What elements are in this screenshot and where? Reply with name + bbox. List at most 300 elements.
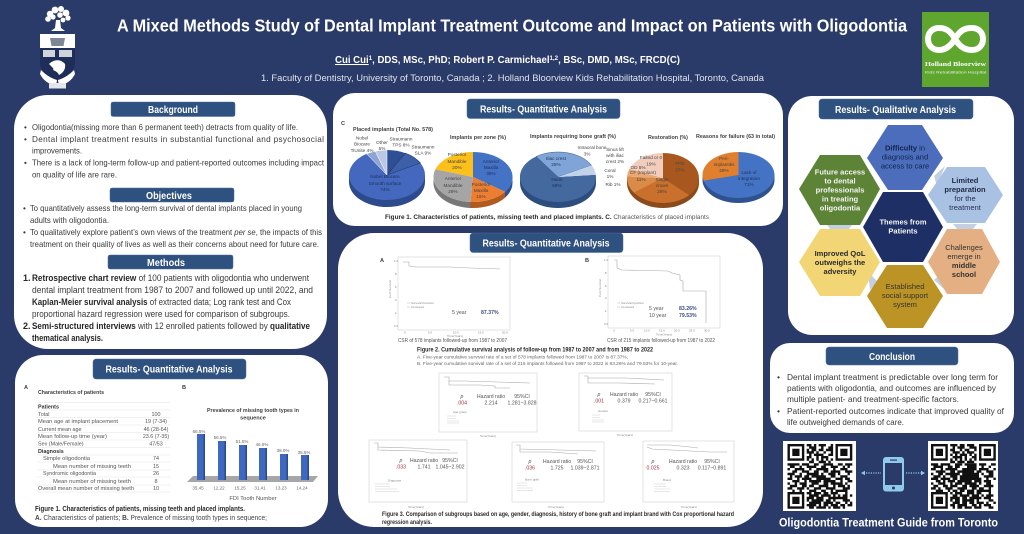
chart: survival curve A: CSR of 578 implants followed-up from 1987 to 2007	[398, 338, 507, 344]
table: characteristics of patients: 74	[153, 456, 159, 462]
pie chart: implants per zone: Mandible	[447, 159, 467, 164]
table: characteristics of patients: 23.6 (7-35)	[143, 434, 169, 440]
bar chart: prevalence of missing tooth types: 15,25	[234, 486, 246, 490]
hexagon: established social support: Established	[886, 282, 924, 291]
pie chart: restoration	[627, 135, 699, 208]
chart: survival curve A: A	[380, 258, 384, 264]
chart: subgroup gender: 0.217~0.661	[638, 398, 668, 404]
heading: Results- Qualitative Analysis	[819, 99, 973, 119]
chart: subgroup brand: Brand	[663, 478, 671, 482]
pie chart: placed implants: Placed implants (Total No. 578)	[353, 127, 433, 133]
hexagon: limited preparation: preparation	[944, 185, 986, 194]
heading: Results- Quantitative Analysis	[467, 99, 620, 118]
text block: conclusion bullets: •	[777, 406, 780, 416]
chart: survival curve B: .6	[604, 284, 607, 288]
text block: conclusion bullets: Patient-reported outcomes indicate that improved quality of	[787, 406, 1005, 416]
panel: background, objectives and methods	[14, 95, 327, 349]
chart: subgroup bone graft	[512, 442, 604, 509]
pie chart: implants requiring bone graft: crest 2%	[606, 159, 624, 164]
hexagon: future access	[799, 155, 880, 225]
pie chart: reasons for failure: Reasons for failure (63 in total)	[696, 134, 775, 140]
chart: survival curve A: 5 year	[452, 310, 467, 316]
pie chart: restoration: 37%	[675, 168, 685, 172]
panel: placed implants pie charts: C	[341, 121, 345, 127]
text block: conclusion bullets: life outweighed demands of care.	[787, 417, 904, 427]
authors: 1,2	[550, 55, 558, 62]
pie chart: reasons for failure: Peri-	[719, 156, 729, 161]
heading: Methods	[108, 255, 233, 269]
chart: survival curve A: Cum Survival	[388, 280, 392, 298]
pie chart: reasons for failure: Lack of	[741, 170, 757, 175]
pie chart: implants requiring bone graft: Implants requiring bone graft (%)	[530, 134, 616, 140]
icon: phone with arrows	[861, 457, 925, 492]
text block: background bullets: on quality of life are rare.	[32, 170, 117, 180]
heading: Objectives: Objectives	[146, 191, 192, 202]
text block: methods list: thematical analysis.	[32, 333, 103, 343]
text block: conclusion bullets: •	[777, 372, 780, 382]
text block: background bullets: •	[24, 123, 27, 132]
pie chart: implants per zone: Maxilla	[484, 165, 499, 170]
chart: subgroup diagnosis: 95%CI	[442, 458, 458, 464]
table: characteristics of patients: A	[24, 385, 28, 391]
chart: subgroup bone graft: p	[528, 459, 532, 465]
bar chart: prevalence of missing tooth types: 38.0%	[277, 448, 289, 453]
logo: Holland Bloorview: Kids Rehabilitation Hospital	[925, 70, 986, 74]
chart: survival curve B: 30.0	[704, 328, 710, 332]
pie chart: placed implants: Straumann	[390, 136, 413, 142]
table: characteristics of patients: 15	[153, 464, 159, 470]
chart: subgroup diagnosis: Time(Years)	[408, 505, 424, 509]
chart: survival curve B: .4	[604, 296, 607, 300]
pie chart: placed implants: Smooth surface	[369, 181, 402, 186]
chart: subgroup brand: 0.025	[647, 466, 660, 472]
chart: survival curve B: 0.0	[604, 322, 609, 326]
pie chart: implants requiring bone graft: with iliac	[606, 153, 625, 158]
logo: Holland Bloorview: Holland Bloorview	[925, 61, 987, 68]
text block: methods list: 1.	[23, 273, 31, 283]
hexagon: established social support: system	[893, 300, 917, 309]
chart: subgroup diagnosis: 1.741	[418, 464, 431, 470]
chart: subgroup bone graft: Hazard ratio	[543, 459, 571, 465]
caption: figure 1 A and B: A. Characteristics of patients; B. Prevalence of missing tooth types in sequence;	[35, 515, 267, 522]
chart: survival curve B: CSR of 215 implants followed-up from 1987 to 2022	[607, 338, 715, 344]
hexagon: improved QoL	[799, 229, 880, 296]
authors: Cui Cui	[335, 55, 369, 66]
hexagon: future access: oligodontia	[820, 204, 861, 212]
table: characteristics of patients: 100	[152, 412, 160, 418]
chart: subgroup age: Hazard ratio	[477, 394, 505, 400]
bar chart: prevalence of missing tooth types: 66.5%	[193, 429, 205, 434]
chart: survival curve B: Survival Function	[621, 301, 644, 305]
chart: subgroup bone graft: Time(Years)	[548, 505, 564, 509]
pie chart: placed implants: Nobel Biocare	[370, 174, 400, 179]
chart: survival curve B: 79.53%	[679, 313, 697, 319]
chart: subgroup age: p	[460, 394, 464, 400]
hexagon: improved QoL: adversity	[824, 267, 857, 276]
chart: survival curve B: 5.0	[630, 328, 635, 332]
table: characteristics of patients: 10	[153, 486, 159, 492]
text block: objectives bullets: •	[23, 204, 26, 213]
chart: survival curve B: Censored	[621, 305, 634, 309]
hexagon: future access: to dental	[824, 176, 856, 186]
chart: subgroup diagnosis: Hazard ratio	[410, 458, 438, 464]
chart: subgroup bone graft: 95%CI	[577, 459, 593, 465]
chart: subgroup diagnosis: Diagnosis	[388, 478, 402, 482]
chart: subgroup brand: p	[651, 459, 655, 465]
chart: survival curve B	[585, 256, 720, 344]
pie chart: restoration: Failed or 0	[640, 155, 662, 160]
chart: survival curve B: 15.0	[659, 328, 665, 332]
hexagon: future access: Future access	[815, 168, 865, 176]
chart: survival curve B: 20.0	[674, 328, 680, 332]
table: characteristics of patients: Syndromic oligodontia	[43, 471, 96, 477]
hexagon: established social support: social support	[882, 291, 929, 300]
affiliations: 1. Faculty of Dentistry, University of Toronto, Canada ; 2. Holland Bloorview Kids Rehabilitation Hospital, Toronto, Canada	[261, 73, 765, 84]
chart: subgroup gender: 0.379	[618, 398, 631, 404]
chart: survival curve A: 20.0	[502, 330, 508, 334]
chart: survival curve B: 83.26%	[679, 306, 697, 312]
hexagon: themes from patients: Themes from	[879, 218, 927, 226]
hexagon: challenges	[928, 229, 1000, 294]
hexagon: difficulty: diagnosis and	[882, 152, 928, 162]
authors: , DDS, MSc, PhD; Robert P. Carmichael	[372, 55, 550, 66]
heading: Results- Quantitative Analysis	[93, 359, 246, 379]
hexagon: challenges: emerge in	[947, 252, 981, 261]
text block: methods list: Semi-structured interviews with 12 enrolled patients followed by qualitative	[32, 321, 310, 331]
chart: survival curve B: Time(Years)	[656, 332, 672, 336]
table: characteristics of patients: Mean follow-up time (year)	[38, 434, 107, 440]
heading: Results- Quantitative Analysis: Results- Quantitative Analysis	[480, 104, 607, 116]
table: characteristics of patients: Mean number of missing teeth	[53, 479, 131, 485]
chart: survival curve B: 10 year	[649, 313, 667, 319]
pie chart: implants requiring bone graft: 1%	[607, 174, 613, 179]
pie chart: restoration: 19%	[646, 162, 656, 166]
text block: methods list: Retrospective chart review of 100 patients with oligodontia who underwent	[32, 273, 309, 283]
pie chart: implants per zone: Implants per zone (%)	[450, 135, 506, 141]
text block: conclusion bullets: patients with oligodontia, and outcomes are influenced by	[787, 383, 997, 393]
table: characteristics of patients: Simple oligodontia	[43, 456, 90, 462]
bar chart: prevalence of missing tooth types: 35.5%	[298, 450, 310, 455]
caption: figure 2: B. Five-year cumulative survival rate of a set of 215 implants followed from 1987 to 2022 is 83.26% and 79.53% for 10-year.	[417, 361, 678, 366]
chart: subgroup bone graft: 1.725	[551, 466, 564, 472]
text block: conclusion bullets: multiple patient- and treatment-specific factors.	[787, 394, 959, 404]
chart: subgroup brand: 0.117~0.891	[698, 466, 726, 472]
chart: subgroup gender: .001	[594, 398, 604, 404]
pie chart: placed implants: 74%	[380, 187, 390, 192]
table: characteristics of patients: 26	[153, 471, 159, 477]
authors: 1	[369, 55, 372, 62]
chart: subgroup gender: 95%CI	[645, 392, 661, 398]
title: A Mixed Methods Study of Dental Implant Treatment Outcome and Impact on Patients with Oligodontia	[117, 16, 907, 36]
pie chart: placed implants: TiUnite 4%	[351, 148, 373, 153]
bar chart: prevalence of missing tooth types	[182, 385, 318, 502]
pie chart: implants per zone: 35%	[486, 171, 496, 176]
panel: conclusion	[770, 343, 1014, 433]
heading: Results- Qualitative Analysis: Results- Qualitative Analysis	[835, 105, 956, 116]
caption: figure 3	[382, 512, 734, 526]
chart: subgroup diagnosis: 1.045~2.902	[436, 464, 465, 470]
chart: survival curve A: 10.0	[453, 330, 459, 334]
chart: survival curve A: .6	[394, 285, 397, 289]
pie chart: implants per zone: 20%	[452, 165, 462, 170]
panel: qualitative analysis	[788, 96, 1014, 335]
pie chart: implants per zone: Posterior	[472, 182, 491, 187]
chart: survival curve A: 87.37%	[481, 310, 499, 316]
bar chart: prevalence of missing tooth types: 13,23	[275, 486, 287, 490]
pie chart: placed implants: Nobel	[356, 136, 368, 140]
chart: survival curve B: Cum Survival	[598, 279, 602, 297]
table: characteristics of patients: Mean age at implant placement	[38, 419, 119, 425]
chart: survival curve A: .8	[394, 272, 397, 276]
table: characteristics of patients: Sex (Male/Female)	[38, 442, 84, 448]
table: characteristics of patients	[24, 385, 170, 492]
text block: background bullets	[24, 123, 325, 180]
heading: Conclusion: Conclusion	[869, 352, 915, 363]
chart: survival curve A: .2	[394, 311, 397, 315]
text block: objectives bullets: •	[23, 228, 26, 237]
table: characteristics of patients: Patients	[38, 404, 59, 410]
text block: objectives bullets: adults with oligodontia.	[30, 216, 109, 225]
table: characteristics of patients: Characteristics of patients	[38, 390, 104, 396]
table: characteristics of patients: Current mean age	[38, 427, 81, 433]
bar chart: prevalence of missing tooth types: sequence	[240, 416, 266, 422]
pie chart: implants requiring bone graft: 25%	[551, 162, 561, 167]
hexagon: themes from patients	[863, 192, 943, 262]
text block: background bullets: There is a lack of long-term follow-up and patient-reported outcomes including impact	[32, 158, 325, 168]
hexagon: difficulty	[867, 125, 943, 190]
heading: Results- Quantitative Analysis: Results- Quantitative Analysis	[106, 364, 233, 376]
pie chart: implants per zone: Anterior	[483, 159, 500, 164]
chart: subgroup age: .004	[457, 400, 467, 406]
chart: subgroup age	[439, 373, 537, 438]
chart: subgroup brand: Time(Years)	[681, 505, 697, 509]
pie chart: implants requiring bone graft: 68%	[552, 183, 562, 188]
chart: subgroup diagnosis: p	[399, 458, 403, 464]
QR code: left	[783, 441, 856, 511]
hexagon: established social support	[867, 265, 943, 328]
caption: figure 2: Figure 2. Cumulative survival analysis of follow-up from 1987 to 2007 and from 1987 to 2022	[417, 348, 654, 354]
pie chart: implants requiring bone graft: Iliac crest	[546, 156, 567, 161]
bar chart: prevalence of missing tooth types: 46.5%	[256, 442, 268, 447]
pie chart: restoration: 11%	[636, 177, 646, 182]
authors: , BSc, DMD, MSc, FRCD(C)	[558, 55, 680, 66]
panel: survival analysis	[338, 233, 763, 527]
chart: survival curve A: Survival Function	[411, 301, 434, 305]
pie chart: restoration: crown	[656, 183, 669, 188]
caption: treatment guide: Oligodontia Treatment Guide from Toronto	[779, 516, 998, 530]
hexagon: difficulty: access to care	[881, 162, 929, 170]
caption: figure 1 C: Figure 1. Characteristics of patients, missing teeth and placed implants. C. Characteristics of placed implants	[385, 214, 710, 221]
chart: survival curve A: Censored	[411, 305, 424, 309]
chart: survival curve B: 5 year	[649, 306, 664, 312]
hexagon: challenges: middle	[952, 261, 976, 270]
pie chart: placed implants: Other	[376, 140, 388, 145]
chart: survival curve A: Time(Years)	[447, 334, 463, 338]
table: characteristics of patients: Overall mean number of missing teeth	[38, 486, 134, 492]
pie chart: implants per zone: Mandible	[443, 183, 463, 188]
pie chart: implants per zone	[433, 135, 513, 208]
hexagon: future access: professionals	[816, 186, 864, 194]
text block: methods list: 2.	[23, 321, 31, 331]
pie chart: placed implants: SLA 9%	[415, 150, 431, 156]
chart: subgroup gender: Gender	[598, 409, 608, 413]
chart: subgroup diagnosis	[369, 440, 467, 509]
hexagon: challenges: Challenges	[945, 243, 983, 252]
caption: figure 2	[417, 348, 678, 366]
hexagon: difficulty: Difficulty in	[885, 144, 925, 152]
chart: survival curve A: 5.0	[428, 330, 433, 334]
heading: Results- Quantitative Analysis	[470, 233, 623, 252]
chart: subgroup age: 95%CI	[514, 394, 530, 400]
bar chart: prevalence of missing tooth types: 51.5%	[236, 439, 248, 444]
text block: background bullets: Dental implant treatment results in substantial functional and psychosocial	[32, 135, 324, 144]
text block: objectives bullets: To qualitatively explore patient’s own views of the treatment per se, the impacts of this	[30, 228, 322, 237]
chart: subgroup age: 1.281~3.828	[508, 400, 537, 406]
chart: subgroup brand: 95%CI	[704, 459, 720, 465]
pie chart: restoration: Restoration (%)	[648, 135, 688, 141]
chart: subgroup gender	[579, 373, 672, 437]
chart: survival curve B: .8	[604, 271, 607, 275]
pie chart: implants requiring bone graft: 3%	[584, 152, 590, 156]
caption: figure 3: regression analysis.	[382, 520, 432, 526]
logo: University of Toronto crest	[40, 6, 75, 88]
chart: subgroup bone graft: Bone graft	[525, 478, 539, 482]
chart: subgroup brand: 0.323	[677, 466, 690, 472]
pie chart: implants per zone: 29%	[448, 189, 458, 194]
panel: placed implants pie charts	[333, 93, 783, 226]
heading: Objectives	[110, 188, 234, 202]
chart: survival curve B: 25.0	[689, 328, 695, 332]
chart: survival curve A: 0	[404, 330, 406, 334]
pie chart: restoration: FPD	[675, 161, 685, 166]
chart: subgroup bone graft: .036	[525, 466, 535, 472]
text block: background bullets: •	[24, 158, 27, 168]
table: characteristics of patients: Mean number of missing teeth	[53, 464, 131, 470]
text block: objectives bullets	[23, 204, 322, 249]
pie chart: restoration: OD 5%	[630, 165, 646, 170]
pie chart: implants per zone: 16%	[476, 194, 486, 199]
hexagon: themes from patients: Patients	[888, 226, 918, 236]
text block: conclusion bullets: Dental implant treatment is predictable over long term for	[787, 372, 998, 382]
text block: methods list: Kaplan-Meier survival analysis of extracted data; Log rank test and Cox	[32, 297, 291, 307]
pie chart: reasons for failure	[696, 134, 775, 203]
text block: methods list: proportional hazard regression were used for comparison of subgroups.	[32, 309, 290, 319]
hexagon: limited preparation	[928, 167, 1003, 223]
pie chart: restoration: 28%	[657, 189, 667, 194]
pie chart: implants requiring bone graft: Sinus lift	[606, 147, 625, 152]
chart: subgroup age: Time(Years)	[480, 434, 496, 438]
caption: figure 3: Figure 3. Comparison of subgroups based on age, gender, diagnosis, history of bone graft and implant brand with Cox proportional hazard	[382, 512, 734, 518]
pie chart: reasons for failure: integration	[738, 176, 760, 181]
pie chart: implants requiring bone graft: Rib 1%	[605, 182, 621, 187]
pie chart: implants requiring bone graft	[520, 134, 625, 208]
text block: background bullets: •	[24, 135, 27, 144]
pie chart: reasons for failure: 71%	[744, 182, 754, 187]
table: characteristics of patients: Diagnosis	[38, 449, 64, 455]
bar chart: prevalence of missing tooth types: 14,24	[296, 486, 308, 490]
logo: Holland Bloorview	[922, 12, 989, 87]
chart: survival curve B: .2	[604, 309, 607, 313]
table: characteristics of patients: Total	[38, 412, 49, 418]
pie chart: implants per zone: Posterior	[448, 152, 467, 157]
chart: survival curve A: 1.0	[394, 259, 399, 263]
hexagon: limited preparation: for the	[954, 194, 976, 203]
chart: subgroup bone graft: 1.039~2.871	[570, 466, 600, 472]
pie chart: reasons for failure: implantitis	[714, 162, 735, 167]
pie chart: reasons for failure: 29%	[719, 168, 729, 173]
heading: Results- Quantitative Analysis: Results- Quantitative Analysis	[482, 238, 610, 250]
pie chart: placed implants	[349, 127, 435, 207]
heading: Methods: Methods	[147, 258, 185, 269]
chart: survival curve B: 1.0	[604, 258, 609, 262]
pie chart: placed implants: Biocare	[354, 142, 370, 146]
hexagon: limited preparation: treatment	[949, 203, 982, 212]
bar chart: prevalence of missing tooth types: Prevalence of missing tooth types in	[207, 408, 300, 414]
heading: Conclusion	[826, 347, 958, 365]
chart: subgroup gender: Time(Years)	[617, 433, 633, 437]
chart: survival curve B: B	[585, 258, 589, 264]
pie chart: implants requiring bone graft: Coral	[604, 168, 616, 173]
chart: survival curve B: 0	[613, 328, 615, 332]
pie chart: implants per zone: Anterior	[445, 176, 462, 181]
pie chart: placed implants: TPS 8%	[392, 142, 410, 148]
hexagon: improved QoL: outweighs the	[815, 258, 865, 267]
chart: subgroup age: 2.214	[485, 400, 498, 406]
hexagon: improved QoL: Improved QoL	[815, 249, 866, 258]
bar chart: prevalence of missing tooth types: 56.5%	[214, 435, 226, 440]
table: characteristics of patients: 19 (7-34)	[145, 419, 167, 425]
chart: subgroup gender: Hazard ratio	[610, 392, 638, 398]
panel: patient characteristics results	[15, 355, 328, 527]
pie chart: implants requiring bone graft: None	[551, 177, 563, 182]
bar chart: prevalence of missing tooth types: FDI Tooth Number	[229, 496, 277, 502]
hexagon: future access: in treating	[822, 194, 859, 204]
chart: survival curve A: .4	[394, 298, 397, 302]
chart: subgroup brand	[643, 441, 734, 509]
hexagon: challenges: school	[952, 270, 976, 279]
chart: survival curve A	[380, 257, 510, 344]
hexagon: limited preparation: Limited	[952, 176, 979, 185]
chart: subgroup gender: p	[597, 392, 601, 398]
bar chart: prevalence of missing tooth types: 31,41	[254, 486, 266, 490]
chart: subgroup diagnosis: .033	[396, 464, 406, 470]
pie chart: placed implants: 5%	[379, 146, 385, 151]
text block: background bullets: Oligodontia(missing more than 6 permanent teeth) detracts from quality of life.	[32, 123, 298, 132]
bar chart: prevalence of missing tooth types: 35,45	[192, 486, 204, 490]
table: characteristics of patients: 46 (28-64)	[144, 427, 169, 433]
chart: survival curve A: 0.0	[394, 324, 399, 328]
text block: background bullets: improvements.	[32, 146, 82, 156]
table: characteristics of patients: 47/53	[149, 442, 163, 448]
text block: conclusion bullets	[777, 372, 1005, 427]
bar chart: prevalence of missing tooth types: 12,22	[213, 486, 225, 490]
chart: survival curve B: 10.0	[644, 328, 650, 332]
caption: figure 1 A and B: Figure 1. Characteristics of patients, missing teeth and placed implants.	[35, 506, 245, 513]
caption: figure 1 A and B	[35, 506, 267, 522]
bar chart: prevalence of missing tooth types: B	[182, 385, 186, 391]
pie chart: placed implants: Straumann	[412, 144, 435, 150]
chart: subgroup age: Age group	[453, 410, 467, 414]
heading: Background	[111, 102, 235, 116]
text block: methods list: dental implant treatment from 1987 to 2007 and followed up until 2022, and	[32, 285, 313, 295]
pie chart: restoration: Single	[655, 177, 669, 182]
pie chart: implants per zone: Maxilla	[474, 188, 489, 193]
heading: Background: Background	[148, 105, 198, 116]
text block: methods list	[23, 273, 313, 343]
caption: figure 2: A. Five-year cumulative survival rate of a set of 578 implants followed from 1987 to 2007 is 87.37%;	[417, 354, 628, 360]
pie chart: implants requiring bone graft: Intraoral bone	[578, 145, 607, 150]
pie chart: restoration: CF (Implant)	[630, 170, 656, 175]
